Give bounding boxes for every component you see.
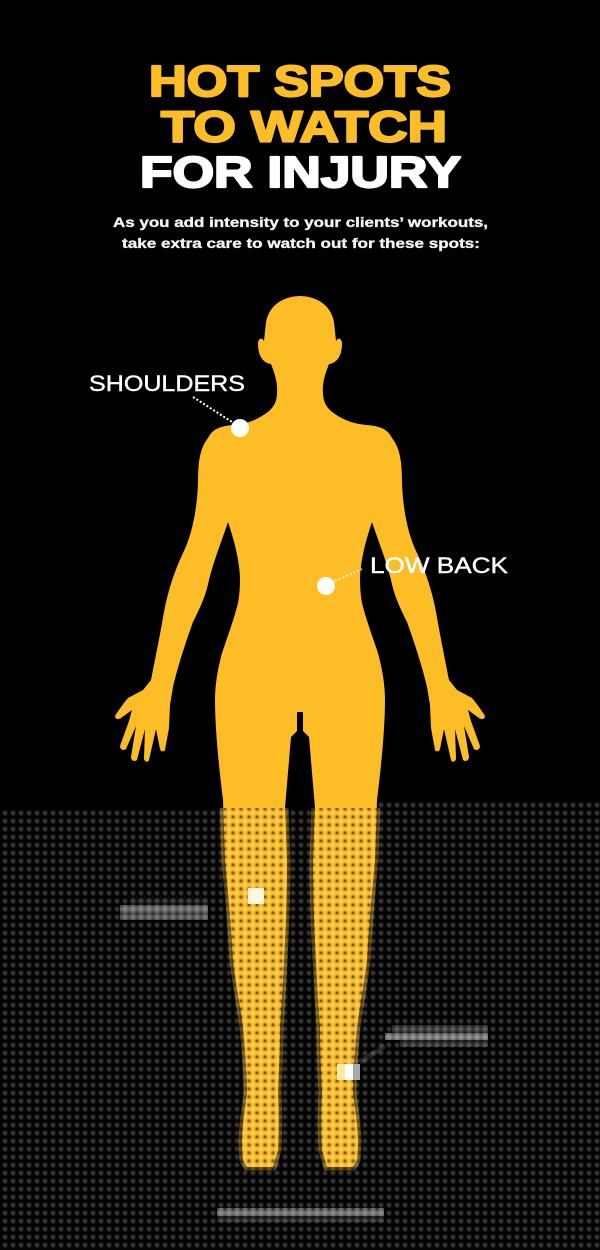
label blur lower row [120, 913, 208, 920]
low back marker [317, 577, 335, 595]
shoulders callout [89, 371, 249, 437]
intro line 2: take extra care to watch out for these spots: [122, 236, 480, 251]
low back label: LOW BACK [370, 553, 508, 578]
right half of body [299, 296, 485, 1167]
footer blur lower row [217, 1216, 384, 1222]
label blur upper row [130, 897, 208, 905]
overlay right section [377, 800, 600, 1250]
blurred leg edges [223, 800, 377, 1167]
title line: for injury: FOR INJURY [140, 148, 461, 197]
halftone dot overlay [0, 800, 600, 1250]
obscured footer text [217, 1208, 384, 1222]
ankle marker grey block [353, 1064, 360, 1080]
obscured label: right leg [385, 1025, 488, 1047]
intro line 1: As you add intensity to your clients’ workouts, [113, 215, 488, 230]
shoulders label: SHOULDERS [89, 371, 245, 396]
low back callout [317, 553, 508, 595]
title line: to watch: TO WATCH [161, 102, 447, 152]
pixelated ankle marker [337, 1064, 360, 1080]
title [140, 57, 461, 197]
label blur center row [385, 1033, 488, 1040]
shoulders leader line [193, 397, 232, 422]
ankle marker light block [337, 1064, 345, 1080]
label blur bottom row [400, 1040, 488, 1047]
overlay left section [0, 808, 377, 1250]
obscured ankle leader line [360, 1046, 385, 1062]
label blur middle row [120, 905, 208, 913]
title line: hot spots: HOT SPOTS [149, 57, 451, 106]
footer blur upper row [217, 1208, 384, 1216]
ankle marker white block [345, 1064, 353, 1080]
obscured label: left leg [120, 897, 208, 920]
low back leader line [335, 569, 362, 581]
left half of body [115, 296, 301, 1167]
left leg edge [223, 800, 287, 1167]
body silhouette [115, 296, 485, 1167]
pixelated knee marker [248, 888, 264, 904]
shoulders marker [231, 419, 249, 437]
label blur top row [392, 1025, 488, 1033]
right leg edge [313, 800, 377, 1167]
intro text [113, 215, 488, 251]
